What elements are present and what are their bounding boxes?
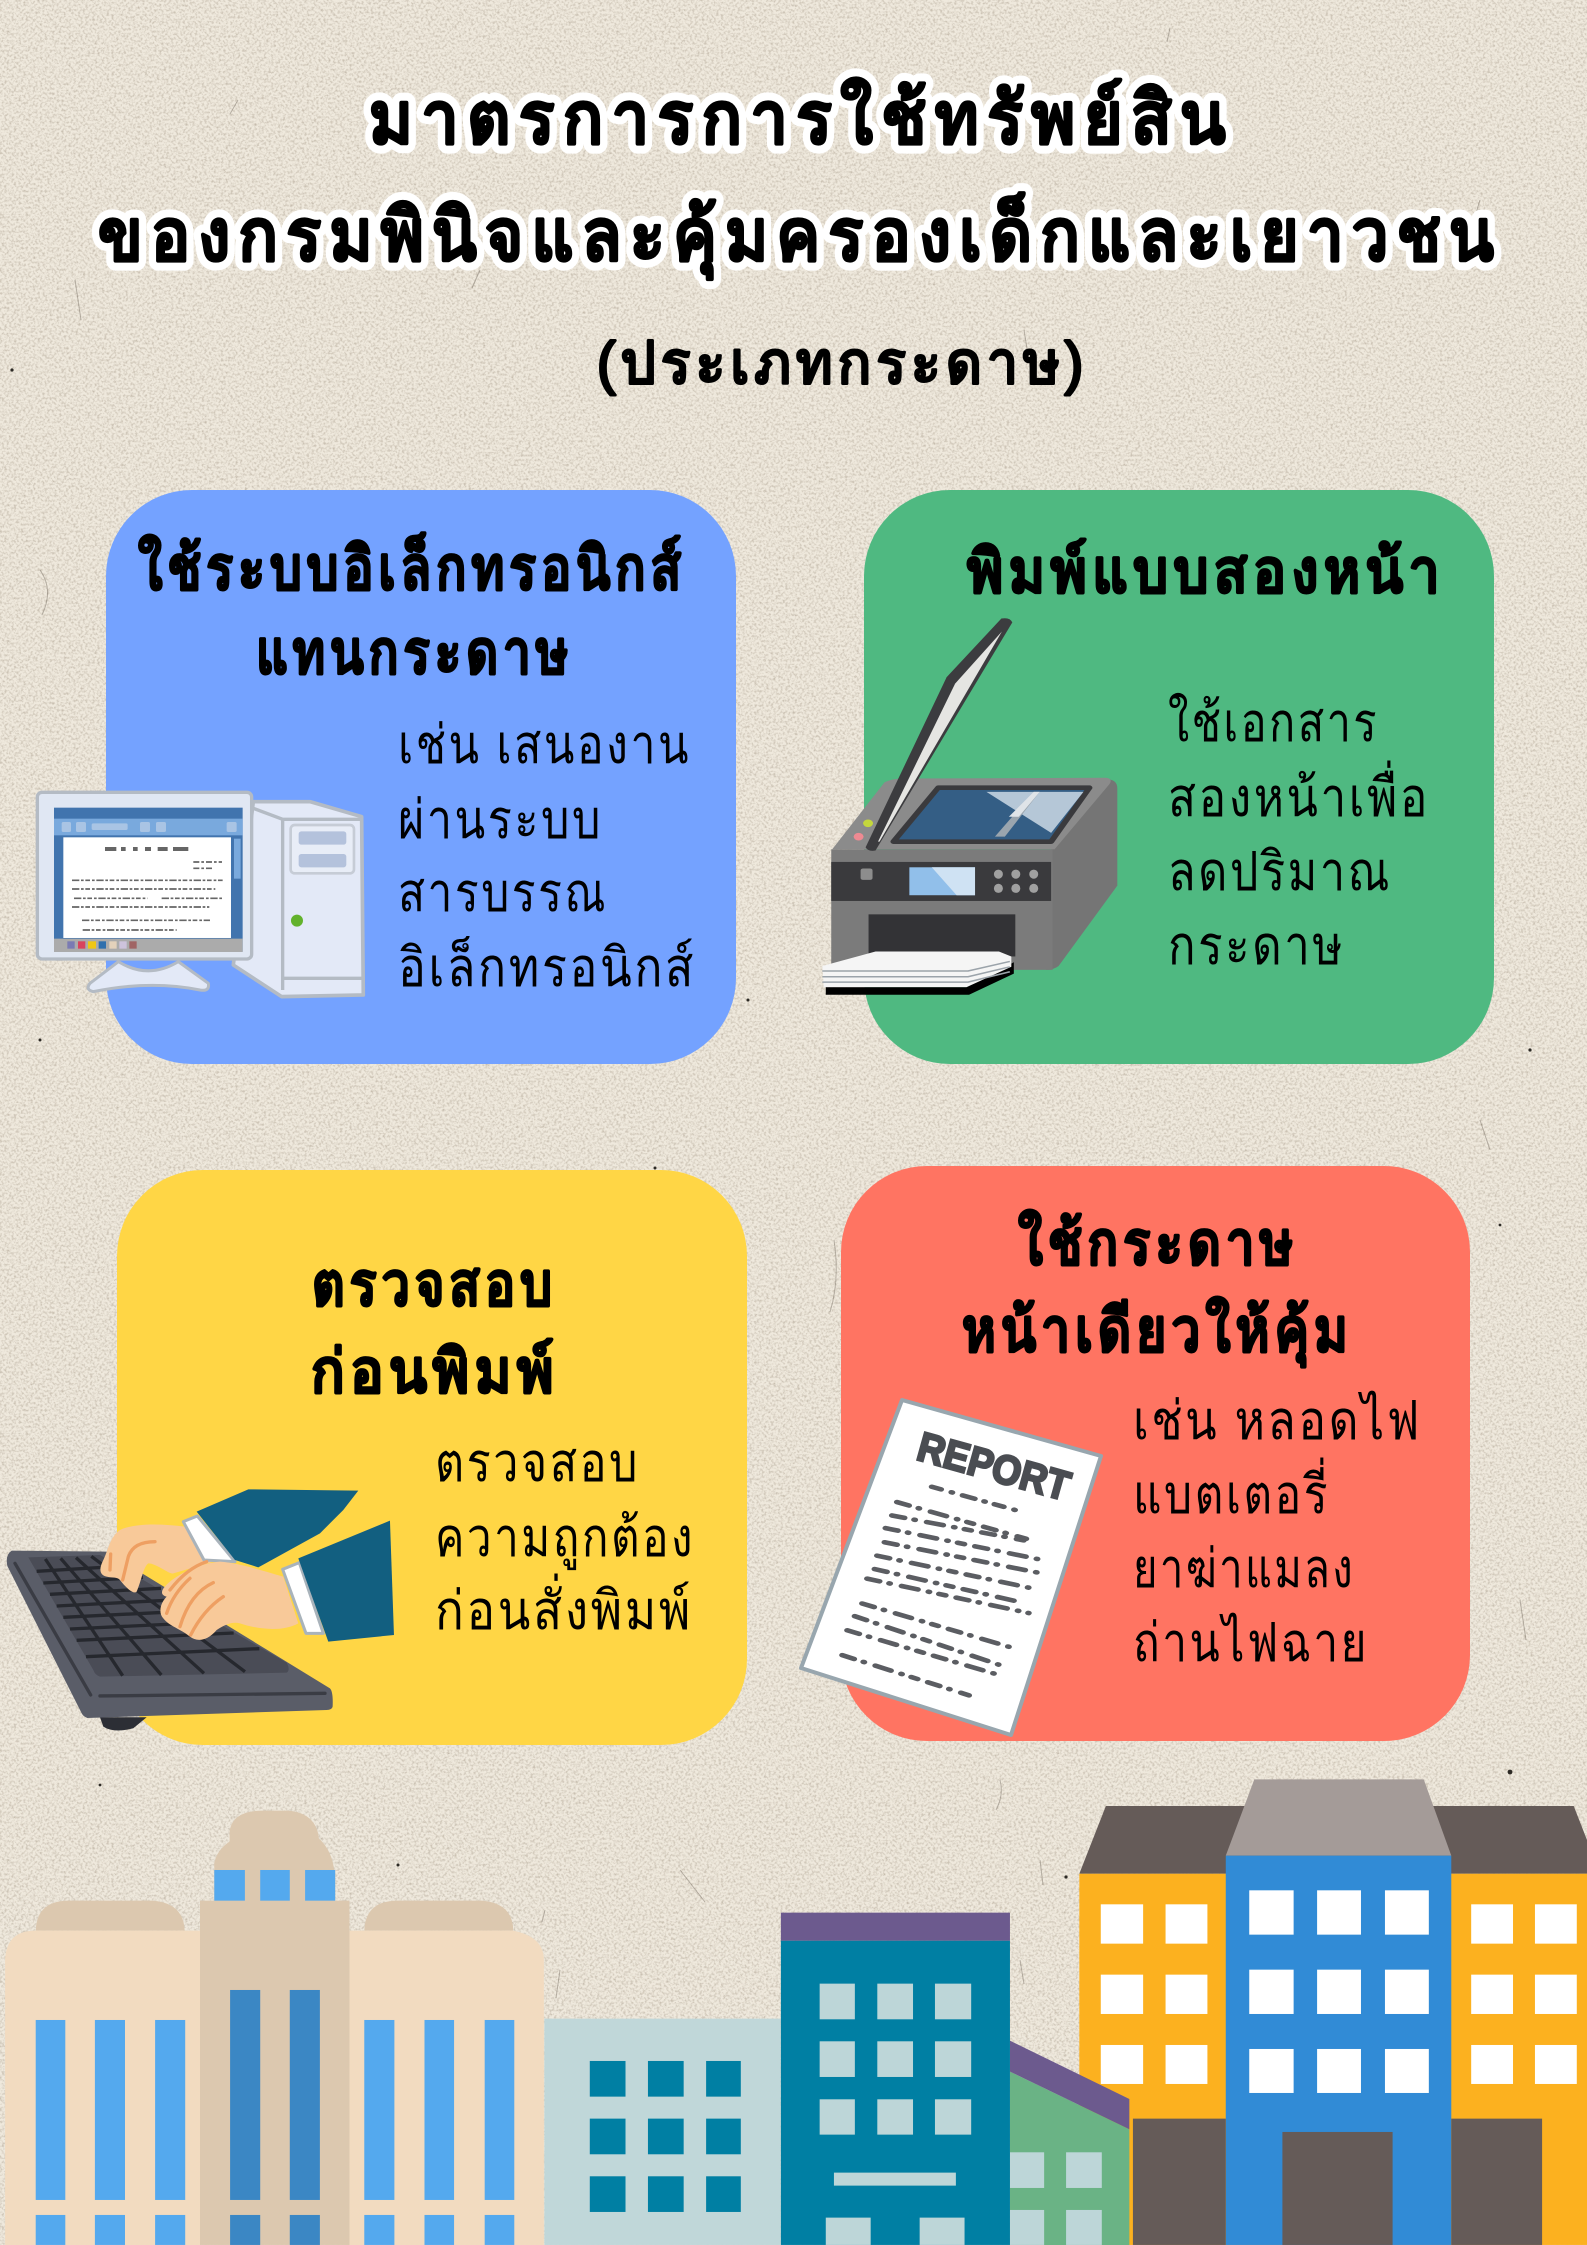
- heading: check before printing: ก่อนพิมพ์: [311, 1338, 559, 1405]
- skyline: teal building: [781, 1913, 1010, 2245]
- body text: verify accuracy: ตรวจสอบ: [435, 1433, 640, 1493]
- heading: check before printing: ตรวจสอบ: [312, 1251, 557, 1318]
- body text: use both sides: ลดปริมาณ: [1168, 842, 1392, 902]
- body text: examples: ยาฆ่าแมลง: [1133, 1539, 1355, 1599]
- skyline: pale blue building: [544, 2019, 781, 2245]
- icon: printer with open lid: [822, 618, 1117, 995]
- heading: use single-sided paper: หน้าเดียวให้คุ้ม: [962, 1296, 1353, 1368]
- heading: use electronic systems: แทนกระดาษ: [256, 619, 573, 686]
- body text: verify accuracy: ความถูกต้อง: [435, 1508, 695, 1570]
- panel: check before printing: [7, 1170, 747, 1745]
- title: [98, 76, 1502, 281]
- body text: verify accuracy: ก่อนสั่งพิมพ์: [435, 1573, 693, 1641]
- body text: examples: แบตเตอรี่: [1133, 1457, 1330, 1525]
- panel: double-sided printing: [822, 490, 1494, 1064]
- icon: report document: [801, 1400, 1101, 1735]
- centre tower: [200, 1901, 349, 2245]
- windows: [36, 1870, 514, 2245]
- body text: examples: [1133, 1390, 1422, 1673]
- body text: electronic document system: [398, 715, 696, 998]
- body text: electronic document system: เช่น เสนองาน: [398, 715, 691, 775]
- heading: use electronic systems: [138, 532, 686, 686]
- body text: examples: ถ่านไฟฉาย: [1133, 1612, 1369, 1673]
- report label: REPORT: [913, 1423, 1075, 1510]
- body text: electronic document system: อิเล็กทรอนิกส์: [398, 936, 696, 998]
- panel background: green: [864, 490, 1494, 1064]
- body text: electronic document system: ผ่านระบบ: [398, 790, 603, 850]
- heading: double-sided printing: พิมพ์แบบสองหน้า: [967, 538, 1445, 605]
- wings: [5, 1931, 200, 2245]
- panel background: blue: [106, 490, 736, 1064]
- body text: electronic document system: สารบรรณ: [398, 863, 608, 923]
- skyline: green house: [1010, 2041, 1129, 2245]
- heading: use single-sided paper: ใช้กระดาษ: [1018, 1209, 1298, 1277]
- panel: use electronic systems: [37, 490, 736, 1064]
- skyline: right orange and blue building: [1079, 1779, 1587, 2245]
- icon: desktop computer: [37, 792, 363, 997]
- body text: use both sides: [1168, 692, 1430, 976]
- panel background: coral: [841, 1166, 1470, 1741]
- body text: use both sides: กระดาษ: [1168, 916, 1345, 976]
- heading: check before printing: [311, 1251, 559, 1405]
- heading: use electronic systems: ใช้ระบบอิเล็กทรอนิกส์: [138, 532, 686, 602]
- body text: verify accuracy: [435, 1433, 695, 1641]
- title: มาตรการการใช้ทรัพย์สิน: [369, 76, 1234, 159]
- title: มาตรการการใช้ทรัพย์สิน: [369, 76, 1234, 159]
- icon: hands typing on keyboard: [7, 1489, 394, 1730]
- panel background: yellow: [117, 1170, 747, 1745]
- heading: use single-sided paper: [962, 1209, 1353, 1368]
- subtitle: (ประเภทกระดาษ): [597, 331, 1088, 396]
- body text: use both sides: ใช้เอกสาร: [1168, 692, 1379, 753]
- body text: examples: เช่น หลอดไฟ: [1133, 1390, 1422, 1451]
- skyline: left beige building: [5, 1811, 544, 2245]
- roof domes: [36, 1811, 513, 1931]
- panel: use single-sided paper wisely: [801, 1166, 1470, 1741]
- body text: use both sides: สองหน้าเพื่อ: [1168, 760, 1430, 828]
